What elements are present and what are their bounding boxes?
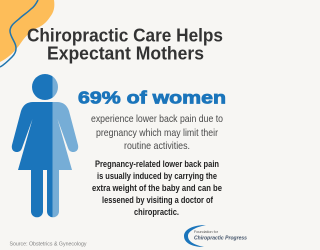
description text: experience lower back pain due to (91, 113, 223, 125)
headline statistic: 69% of women (78, 88, 226, 108)
bold explanation text: lessened by visiting a doctor of (102, 195, 214, 206)
description text: routine activities. (124, 140, 190, 152)
title: Expectant Mothers (47, 44, 204, 64)
blue wavy line (0, 0, 38, 67)
title (27, 26, 223, 64)
bold explanation text: is usually induced by carrying the (97, 171, 217, 182)
icon: woman figure 69 percent filled (12, 74, 78, 217)
description text: pregnancy which may limit their (96, 127, 218, 139)
logo: Foundation for Chiropractic Progress: Foundation for (194, 230, 219, 234)
yellow corner blob (0, 0, 54, 62)
source note: Source: Obstetrics & Gynecology (10, 242, 87, 248)
bold explanation text: Pregnancy-related lower back pain (95, 159, 219, 170)
bold explanation text: extra weight of the baby and can be (92, 183, 222, 194)
bold explanation text: chiropractic. (134, 207, 179, 218)
title: Chiropractic Care Helps (27, 26, 223, 46)
logo: Foundation for Chiropractic Progress (184, 225, 247, 247)
bold explanation text (92, 159, 222, 218)
description text (91, 113, 223, 152)
